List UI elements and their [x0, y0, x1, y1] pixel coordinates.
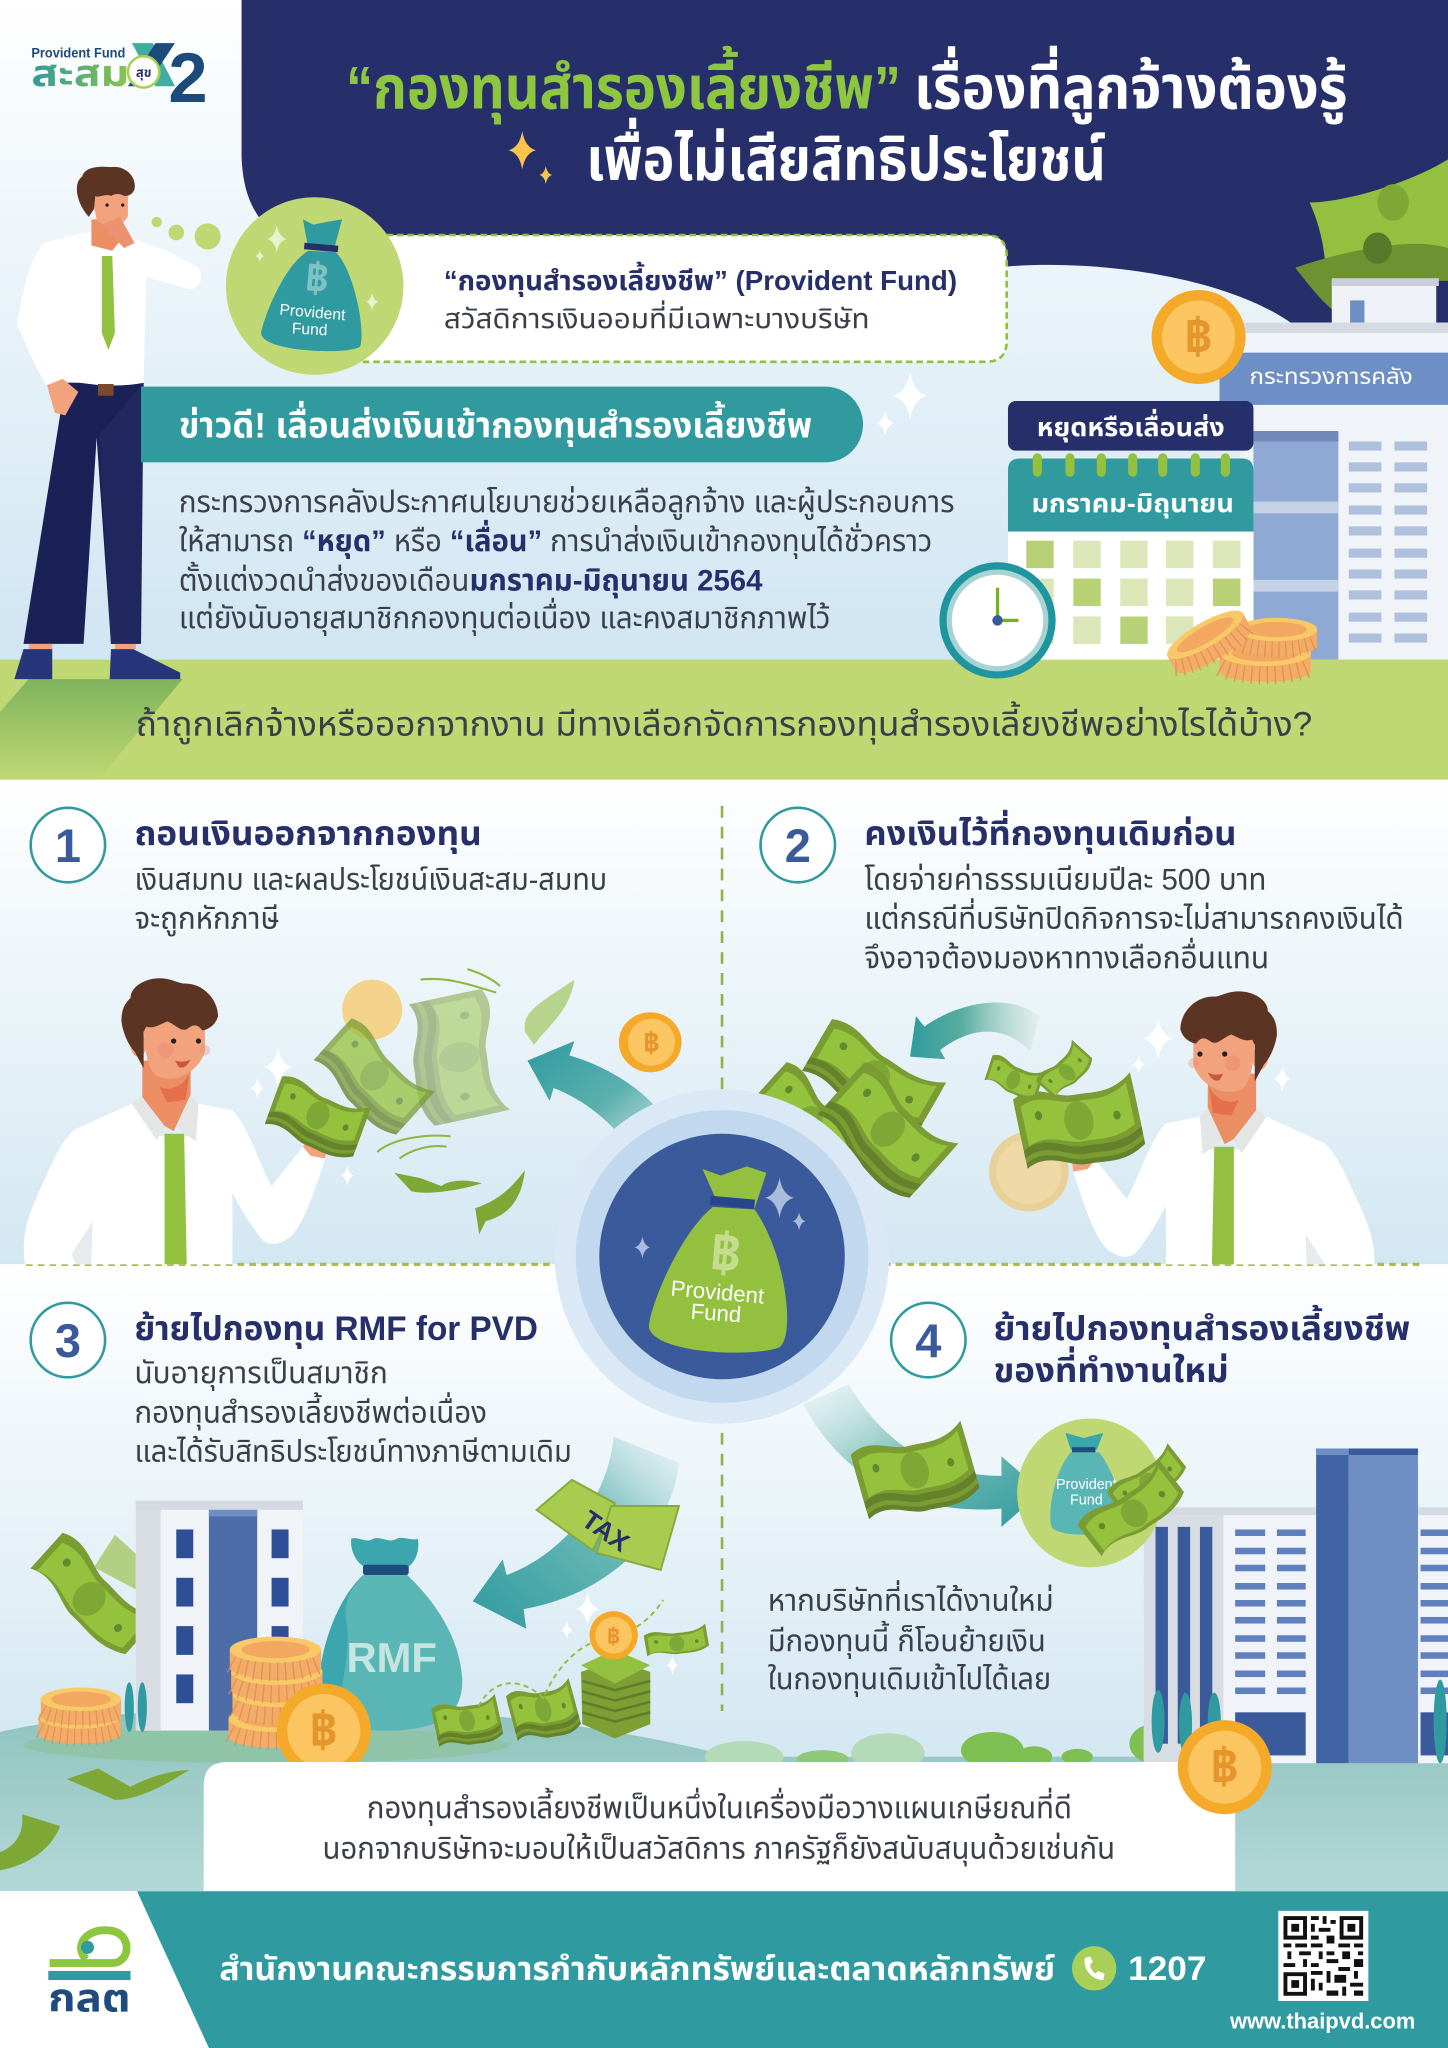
text 2: แต่กรณีที่บริษัทปิดกิจการจะไม่สามารถคงเงินได้ — [864, 898, 1404, 936]
arrow: to new fund — [803, 1384, 1042, 1527]
calendar: มกราคม-มิถุนายน — [1031, 488, 1234, 519]
heading 4 — [994, 1304, 1410, 1390]
icon: coin orange left — [619, 1012, 682, 1072]
icon: fund bag in circle: Provident — [279, 302, 347, 324]
icon: fund bag in circle: Fund — [291, 320, 328, 339]
background: lower options panel — [0, 1264, 1448, 1761]
number badge 3 — [31, 1303, 105, 1377]
option 3 — [31, 1303, 572, 1469]
heading 4: ย้ายไปกองทุนสำรองเลี้ยงชีพ — [994, 1304, 1410, 1349]
sparkles right — [1132, 1017, 1291, 1092]
text 4 — [768, 1579, 1054, 1697]
icon: fund bag in circle: ฿ — [303, 254, 332, 303]
icon: coin top — [1152, 290, 1246, 384]
arrow: to RMF — [473, 1437, 679, 1629]
text 3: กองทุนสำรองเลี้ยงชีพต่อเนื่อง — [134, 1391, 487, 1430]
text 2: โดยจ่ายค่าธรรมเนียมปีละ 500 บาท — [864, 863, 1267, 896]
bottom bills — [0, 1768, 189, 1870]
money piles RMF — [431, 1593, 710, 1752]
QR code — [1278, 1911, 1368, 2001]
text 4: หากบริษัทที่เราได้งานใหม่ — [768, 1579, 1054, 1617]
heading 2: คงเงินไว้ที่กองทุนเดิมก่อน — [864, 809, 1236, 854]
text 4: ในกองทุนเดิมเข้าไปได้เลย — [768, 1663, 1051, 1697]
text block: announcement: กระทรวงการคลังประกาศนโยบายช่วยเหลือลูกจ้าง และผู้ประกอบการ — [179, 486, 954, 520]
calendar — [1008, 401, 1253, 660]
logo: Provident Fund X2: สะสม — [31, 53, 129, 94]
TAX bill: TAX — [577, 1504, 635, 1558]
ground hills — [0, 1707, 1448, 1891]
text 2 — [864, 863, 1404, 975]
arrow: to withdraw — [527, 1041, 679, 1169]
text 3 — [134, 1357, 572, 1469]
number badge 4 — [891, 1303, 966, 1377]
number badge 1 — [31, 808, 105, 882]
RMF bag — [319, 1538, 462, 1731]
option 2 — [761, 808, 1404, 975]
question text: ถ้าถูกเลิกจ้างหรือออกจากงาน มีทางเลือกจัดการกองทุนสำรองเลี้ยงชีพอย่างไรได้บ้าง? — [136, 700, 1312, 744]
icon: flying banknotes top right — [1295, 159, 1448, 313]
building left — [125, 1501, 303, 1732]
icon: coin orange left: ฿ — [643, 1028, 660, 1060]
logo: Provident Fund X2: สุข — [136, 65, 151, 80]
icon: gold sparkles — [509, 131, 552, 184]
title: “กองทุนสำรองเลี้ยงชีพ” — [346, 45, 901, 124]
new workplace icon with money: Fund — [1070, 1493, 1103, 1509]
text block: announcement: แต่ยังนับอายุสมาชิกกองทุนต่อเนื่อง และคงสมาชิกภาพไว้ — [179, 597, 830, 636]
SEC logo — [48, 1930, 131, 2020]
RMF bag: RMF — [346, 1634, 437, 1681]
website: www.thaipvd.com — [1229, 2008, 1415, 2033]
background: upper options panel — [0, 780, 1448, 1264]
text block: announcement: ตั้งแต่งวดนำส่งของเดือนมกราคม-มิถุนายน 2564 — [179, 561, 763, 598]
title: เพื่อไม่เสียสิทธิประโยชน์ — [586, 117, 1106, 193]
icon: coin bottom — [1178, 1720, 1272, 1814]
option 1 — [31, 808, 607, 937]
man thinking — [14, 167, 201, 679]
sparkles left — [250, 1047, 354, 1186]
money piles RMF: ฿ — [607, 1623, 620, 1649]
panel: provident fund definition: สวัสดิการเงินออมที่มีเฉพาะบางบริษัท — [444, 300, 870, 334]
coin stacks left — [39, 1637, 324, 1748]
green ground band — [0, 660, 1448, 780]
title — [346, 45, 1347, 193]
number badge 2: 2 — [785, 819, 811, 872]
logo: Provident Fund X2 — [31, 38, 208, 117]
building: ministry of finance: กระทรวงการคลัง — [1250, 364, 1413, 389]
background: top panel — [0, 0, 1448, 666]
heading 1: ถอนเงินออกจากกองทุน — [134, 815, 482, 854]
money flying left group — [262, 969, 574, 1234]
text 2: จึงอาจต้องมองหาทางเลือกอื่นแทน — [864, 937, 1269, 975]
man shadow — [0, 679, 183, 780]
logo: Provident Fund X2: 2 — [168, 38, 208, 117]
central provident fund bag: ฿ — [707, 1221, 745, 1285]
panel: provident fund definition: “กองทุนสำรองเลี้ยงชีพ” (Provident Fund) — [444, 261, 957, 297]
text 1 — [134, 863, 607, 937]
central provident fund bag: Provident — [670, 1276, 765, 1309]
panel: provident fund definition — [359, 235, 1007, 362]
text 3: นับอายุการเป็นสมาชิก — [134, 1357, 388, 1391]
number badge 4: 4 — [915, 1314, 941, 1367]
navy header shape — [242, 0, 1448, 340]
closing text box — [204, 1762, 1235, 1891]
money stack with arrow — [849, 1419, 982, 1528]
banner: good news — [141, 387, 863, 462]
bushes — [705, 1724, 1176, 1772]
icon: fund bag in circle — [226, 197, 403, 375]
option 4 — [768, 1303, 1410, 1697]
footer band — [0, 1891, 1448, 2048]
closing text box: กองทุนสำรองเลี้ยงชีพเป็นหนึ่งในเครื่องมือวางแผนเกษียณที่ดี — [367, 1787, 1072, 1826]
text 4: มีกองทุนนี้ ก็โอนย้ายเงิน — [768, 1620, 1046, 1659]
central provident fund bag: Fund — [690, 1299, 742, 1327]
arrow: keep money — [910, 1002, 1039, 1059]
banner: good news: ข่าวดี! เลื่อนส่งเงินเข้ากองทุนสำรองเลี้ยงชีพ — [179, 400, 812, 447]
text block: announcement: ให้สามารถ “หยุด” หรือ “เลื่อน” การนำส่งเงินเข้ากองทุนได้ชั่วคราว — [179, 519, 932, 559]
bill behind left building — [24, 1530, 160, 1661]
building right — [1144, 1448, 1448, 1763]
central provident fund bag — [555, 1089, 889, 1424]
icon: phone — [1072, 1946, 1116, 1991]
TAX bill — [537, 1480, 679, 1570]
title: เรื่องที่ลูกจ้างต้องรู้ — [914, 45, 1347, 124]
money group right — [738, 1016, 1147, 1211]
number badge 1: 1 — [55, 819, 81, 872]
thought bubbles — [151, 217, 221, 249]
icon: clock — [939, 562, 1056, 679]
man holding money left — [24, 978, 326, 1264]
number badge 2 — [761, 808, 835, 882]
text 1: จะถูกหักภาษี — [134, 903, 279, 937]
number badge 3: 3 — [55, 1314, 81, 1367]
man holding money right — [1072, 991, 1375, 1277]
new workplace icon with money: Provident — [1056, 1477, 1117, 1493]
icon: white sparkles — [876, 372, 927, 436]
text 1: เงินสมทบ และผลประโยชน์เงินสะสม-สมทบ — [134, 863, 607, 896]
SEC logo: กลต — [48, 1977, 131, 2020]
footer organisation text: สำนักงานคณะกรรมการกำกับหลักทรัพย์และตลาดหลักทรัพย์ — [219, 1950, 1055, 1987]
logo: Provident Fund X2: Provident Fund — [31, 45, 125, 60]
closing text box: นอกจากบริษัทจะมอบให้เป็นสวัสดิการ ภาครัฐก็ยังสนับสนุนด้วยเช่นกัน — [323, 1833, 1115, 1867]
new workplace icon with money — [1017, 1418, 1189, 1567]
green island — [24, 1727, 509, 1763]
heading 4: ของที่ทำงานใหม่ — [994, 1346, 1229, 1390]
building: ministry of finance — [1220, 278, 1448, 660]
icon: coin stacks — [1161, 602, 1317, 682]
heading 3: ย้ายไปกองทุน RMF for PVD — [134, 1310, 538, 1349]
calendar: หยุดหรือเลื่อนส่ง — [1037, 408, 1225, 443]
text block: announcement — [179, 486, 954, 636]
icon: coin RMF — [277, 1684, 371, 1778]
text 3: และได้รับสิทธิประโยชน์ทางภาษีตามเดิม — [134, 1436, 572, 1469]
phone number: 1207 — [1128, 1950, 1206, 1988]
